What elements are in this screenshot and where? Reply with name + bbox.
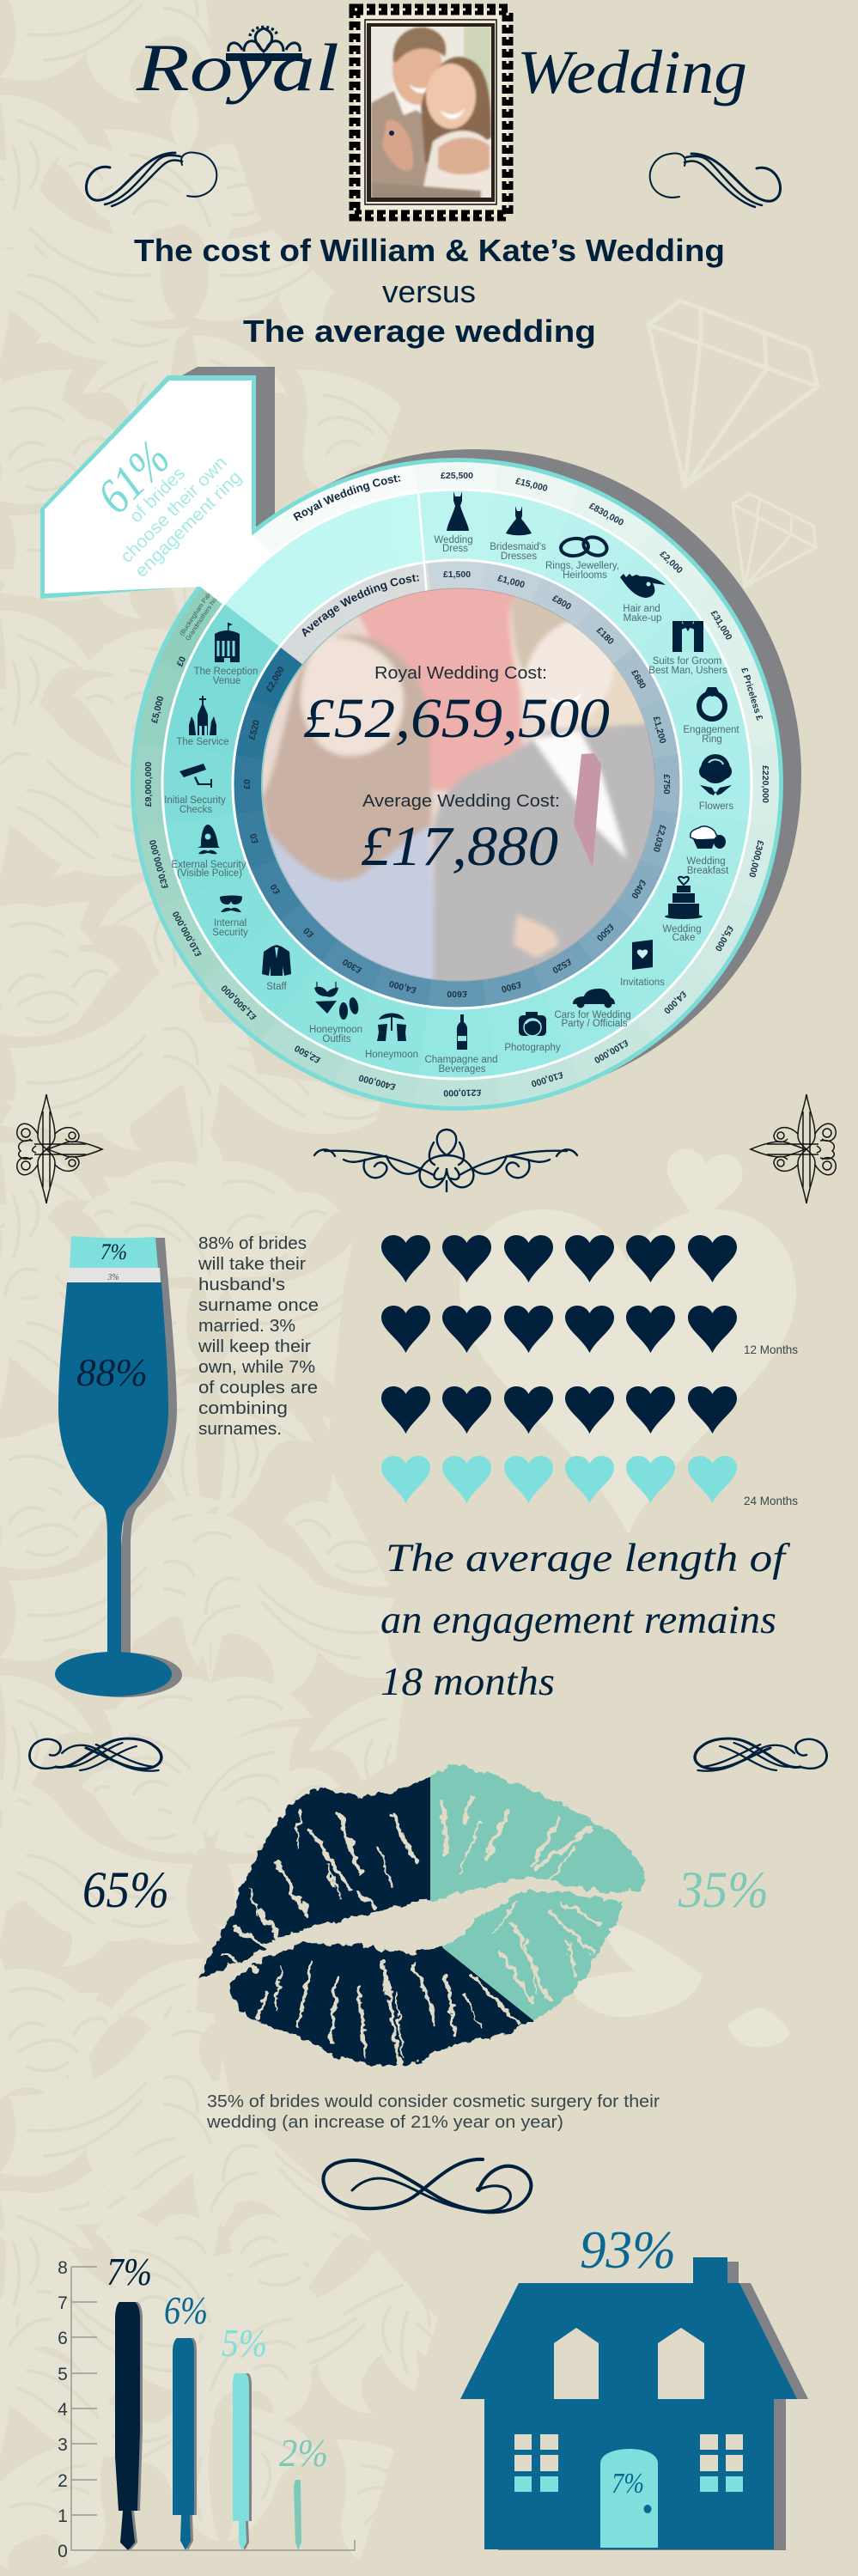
- callout: 61% of brides choose their own engagement ring: engagement ring: [131, 467, 246, 582]
- hearts chart: months of engagement: [381, 1235, 798, 1507]
- inner ring values: average wedding costs: £0: [242, 779, 253, 789]
- text block: cosmetic surgery statistic: wedding (an increase of 21% year on year): [206, 2113, 563, 2132]
- script text: average engagement length: [380, 1536, 791, 1704]
- item: initial security checks: Checks: [180, 805, 212, 815]
- item: staff: [262, 945, 291, 992]
- teal window panes: [514, 2476, 743, 2492]
- glass chart: surname statistics: 7%: [100, 1239, 127, 1264]
- item: wedding dress: [434, 491, 473, 554]
- item: honeymoon outfits: [309, 982, 362, 1044]
- title: Wedding: Wedding: [517, 38, 747, 107]
- item: invitations: Invitations: [620, 977, 665, 988]
- chart axes and scale: 3: [58, 2435, 68, 2455]
- item: rings, jewellery, heirlooms: Heirlooms: [563, 570, 607, 581]
- item: external security (visible police): [172, 825, 246, 879]
- photo frame with portrait of William and Kate: [355, 9, 508, 216]
- script text: average engagement length: The average length of: [386, 1536, 791, 1580]
- item: wedding cake: Wedding: [662, 924, 702, 935]
- item: wedding cake: Cake: [672, 933, 695, 943]
- glass band: 3%: [68, 1268, 161, 1282]
- 65 percent label: 65%: [82, 1861, 169, 1918]
- icon: tiara: [226, 27, 302, 61]
- item: bridesmaid's dresses: Bridesmaid's: [490, 542, 546, 552]
- text block: surname statistics: will take their: [198, 1255, 306, 1274]
- item: wedding breakfast: Breakfast: [687, 866, 729, 876]
- item: honeymoon outfits: Outfits: [322, 1034, 351, 1044]
- ornament: right knot flourish: [695, 1739, 827, 1771]
- item: external security (visible police): External Security: [172, 860, 246, 870]
- chart axes and scale: 7: [58, 2293, 68, 2313]
- outer ring values: royal wedding costs: £400,000: [357, 1072, 397, 1092]
- outer ring values: royal wedding costs: £220,000: [760, 765, 770, 803]
- item: wedding breakfast: Wedding: [686, 856, 726, 867]
- dormer windows: [554, 2328, 704, 2399]
- ring label: Royal Wedding Cost: Royal Wedding Cost:: [293, 474, 400, 521]
- background icon: large diamond outline: [648, 301, 818, 487]
- outer ring values: royal wedding costs: £210,000: [443, 1087, 481, 1098]
- item: wedding cake: [662, 877, 703, 943]
- faint background lips large: [569, 1921, 703, 2017]
- house windows: [514, 2434, 743, 2471]
- house body and roof: [460, 2257, 797, 2549]
- glass bowl and stem: 88%: [58, 1282, 168, 1656]
- wheel drop shadow: [149, 449, 801, 1102]
- inner ring values: average wedding costs: £180: [594, 625, 616, 647]
- glass chart: surname statistics: 88%: [76, 1350, 148, 1394]
- text block: surname statistics: surname once: [198, 1296, 319, 1315]
- bar chart: pen bars: [58, 2250, 355, 2561]
- item: cars for wedding party / officials: Cars for Wedding: [554, 1010, 631, 1020]
- item: champagne and beverages: Beverages: [439, 1064, 486, 1075]
- chart axes and scale: [58, 2258, 355, 2561]
- item: honeymoon: Honeymoon: [365, 1050, 418, 1060]
- inner ring values: average wedding costs: £0: [301, 925, 316, 940]
- house chart: 93% vs 7%: [460, 2221, 808, 2550]
- outer ring values: royal wedding costs: £4,000: [661, 989, 688, 1016]
- inner ring values: average wedding costs: £680: [629, 668, 648, 691]
- inner ring values: average wedding costs: £0: [268, 882, 283, 896]
- item: the reception venue: Venue: [213, 676, 240, 686]
- item: initial security checks: Initial Security: [164, 795, 226, 806]
- outer ring values: royal wedding costs: £100,000: [592, 1038, 630, 1065]
- chart axes and scale: 1: [58, 2506, 68, 2526]
- ornament: central scroll divider: [314, 1130, 577, 1191]
- item: rings, jewellery, heirlooms: [545, 533, 619, 581]
- inner ring: average wedding cost bands: [161, 489, 752, 1080]
- glass rim: 7%: [70, 1236, 158, 1268]
- item: bridesmaid's dresses: Dresses: [501, 551, 537, 562]
- outer ring values: royal wedding costs: £830,000: [587, 501, 625, 528]
- outer ring values: royal wedding costs: £25,500: [441, 471, 473, 481]
- item: honeymoon outfits: Honeymoon: [309, 1025, 362, 1035]
- outer ring values: royal wedding costs: Grandmothers house): [184, 586, 226, 642]
- outer ring values: royal wedding costs: £5,000: [149, 695, 166, 724]
- outer ring values: royal wedding costs: £5,000: [713, 924, 735, 953]
- item: wedding breakfast: [686, 826, 729, 876]
- background icon: small diamond outline: [733, 494, 816, 587]
- script text: average engagement length: an engagement remains: [380, 1598, 776, 1642]
- pen value labels: [106, 2250, 328, 2475]
- inner ring values: average wedding costs: £520: [551, 956, 573, 975]
- house door: 7%: 7%: [612, 2468, 644, 2500]
- callout: 61% of brides choose their own engagement ring: choose their own: [117, 453, 231, 567]
- item: honeymoon: [365, 1014, 418, 1060]
- glass chart: surname statistics: 3%: [106, 1273, 119, 1282]
- callout shadow: [182, 367, 275, 537]
- inner ring values: average wedding costs: £2,030: [651, 824, 668, 853]
- wheel outer teal rim: [131, 458, 783, 1111]
- inner ring values: average wedding costs: £750: [661, 774, 672, 795]
- item: suits for groom, best man, ushers: Suits for Groom: [653, 656, 721, 667]
- item: invitations: [620, 940, 665, 988]
- middle ring: item bands: [94, 421, 820, 1148]
- callout: 61% of brides choose their own engagement ring: of brides: [126, 464, 189, 527]
- text block: surname statistics: 88% of brides: [198, 1234, 307, 1253]
- inner ring values: average wedding costs: £1,200: [651, 716, 668, 745]
- center number: royal total: £52,659,500: [303, 687, 610, 750]
- item: hair and make-up: [620, 574, 666, 624]
- chart axes and scale: 6: [58, 2329, 68, 2348]
- text block: surname statistics: own, while 7%: [198, 1358, 315, 1377]
- glass chart: surname statistics: [55, 1236, 182, 1697]
- 35 percent label: 35%: [678, 1861, 769, 1918]
- inner ring values: average wedding costs: £2,000: [264, 665, 287, 694]
- pen value labels: 6%: [164, 2288, 208, 2332]
- pen bar 2%: [294, 2480, 301, 2550]
- script text: average engagement length: 18 months: [380, 1659, 555, 1704]
- heading: The average wedding: The average wedding: [243, 314, 596, 349]
- item: champagne and beverages: Champagne and: [424, 1055, 498, 1065]
- inner ring values: average wedding costs: £1,000: [496, 573, 526, 590]
- chart axes and scale: 0: [58, 2542, 68, 2561]
- outer ring values: royal wedding costs: (Buckingham Palace-: [178, 582, 219, 637]
- glass shadow: [121, 1238, 177, 1662]
- center text: Average Wedding Cost: Average Wedding Cost:: [362, 792, 560, 811]
- outer ring values: royal wedding costs: £0: [174, 655, 188, 668]
- outer ring values: royal wedding costs: £30,000,000: [148, 838, 171, 890]
- outer ring values: royal wedding costs: £2,500: [293, 1043, 322, 1065]
- heading: The cost of William & Kate's Wedding: The cost of William & Kate’s Wedding: [134, 233, 725, 268]
- item: hair and make-up: Make-up: [624, 613, 661, 624]
- title: Royal: Royal: [136, 30, 339, 105]
- item: engagement ring: Engagement: [683, 725, 739, 735]
- item: engagement ring: Ring: [702, 734, 722, 745]
- chart axes and scale: 5: [58, 2365, 68, 2384]
- center number: average total: £17,880: [361, 815, 558, 878]
- item: the reception venue: The Reception: [194, 667, 258, 677]
- item: the service: [176, 696, 229, 747]
- pen bar 5%: [233, 2373, 252, 2550]
- glass base shadow: [64, 1653, 182, 1697]
- callout: 61% of brides choose their own engagement ring: 61%: [86, 429, 180, 524]
- item: suits for groom, best man, ushers: Best Man, Ushers: [648, 666, 727, 676]
- house value: 93%: 93%: [580, 2221, 676, 2280]
- heading: versus: versus: [382, 274, 476, 309]
- item: suits for groom, best man, ushers: [648, 621, 727, 676]
- text block: surname statistics: of couples are: [198, 1379, 318, 1398]
- item: initial security checks: [164, 764, 226, 815]
- faint background lips small: [727, 2007, 790, 2047]
- item: bridesmaid's dresses: [490, 506, 546, 562]
- item: rings, jewellery, heirlooms: Rings, Jewellery,: [545, 561, 619, 571]
- outer ring values: royal wedding costs: [143, 471, 770, 1098]
- item: internal security: Security: [212, 928, 248, 938]
- ornament: infinity flourish: [324, 2159, 531, 2212]
- text block: surname statistics: will keep their: [198, 1337, 311, 1356]
- outer ring values: royal wedding costs: £1,500,000: [219, 983, 259, 1022]
- ornament: top left flourish: [86, 153, 216, 206]
- item: photography: Photography: [504, 1043, 561, 1053]
- outer ring values: royal wedding costs: £10,000: [530, 1069, 564, 1089]
- center text: Royal Wedding Cost: Royal Wedding Cost:: [374, 664, 547, 683]
- chart axes and scale: 2: [58, 2471, 68, 2491]
- outer ring values: royal wedding costs: £ Priceless £: [739, 667, 764, 722]
- house shadow: [498, 2262, 808, 2550]
- ornament: left knot flourish: [29, 1739, 161, 1771]
- outer ring values: royal wedding costs: £31,000: [709, 609, 734, 642]
- item: photography: [504, 1012, 561, 1053]
- text block: surname statistics: [198, 1234, 319, 1439]
- item: external security (visible police): (Visible Police): [177, 868, 242, 879]
- panel: cost wheel: [131, 458, 783, 1111]
- inner ring values: average wedding costs: £600: [447, 989, 467, 999]
- pen value labels: 2%: [279, 2431, 328, 2475]
- item: wedding dress: Wedding: [434, 535, 473, 545]
- inner ring values: average wedding costs: £0: [248, 832, 261, 844]
- ornament: top right flourish: [650, 154, 781, 207]
- text block: surname statistics: combining: [198, 1399, 288, 1418]
- glass base: [55, 1652, 172, 1696]
- item: flowers: [699, 754, 733, 812]
- text block: cosmetic surgery statistic: [206, 2092, 660, 2132]
- hearts chart: months of engagement: 24 Months: [744, 1494, 798, 1507]
- inner ring values: average wedding costs: £1,500: [443, 569, 471, 580]
- hearts chart: months of engagement: 12 Months: [744, 1343, 798, 1356]
- item: engagement ring: [683, 687, 739, 745]
- inner ring values: average wedding costs: £300: [341, 956, 363, 975]
- callout: 61% of brides choose their own engagement ring: [40, 375, 272, 605]
- pen bar 6%: [173, 2338, 197, 2550]
- chart axes and scale: 8: [58, 2258, 68, 2278]
- text block: surname statistics: married. 3%: [198, 1317, 295, 1336]
- item: cars for wedding party / officials: Party / Officials: [561, 1019, 628, 1029]
- background icon: small faint heart: [660, 1147, 745, 1232]
- inner ring values: average wedding costs: £500: [594, 922, 616, 943]
- inner ring values: average wedding costs: £400: [629, 878, 648, 900]
- inner ring values: average wedding costs: £800: [551, 594, 573, 612]
- text block: surname statistics: surnames.: [198, 1420, 282, 1439]
- item: wedding dress: Dress: [442, 544, 468, 554]
- pen value labels: 5%: [222, 2321, 267, 2365]
- item: staff: Staff: [266, 982, 288, 992]
- item: internal security: Internal: [214, 918, 246, 929]
- inner ring values: average wedding costs: £520: [246, 719, 262, 741]
- ornament: left fleur corner: [17, 1094, 102, 1203]
- ring label: Average Wedding Cost: Average Wedding Cost:: [302, 574, 419, 637]
- center photo of the couple: [258, 584, 678, 988]
- lips chart: 65% navy and 35% teal: [199, 1766, 646, 2067]
- item: the service: The Service: [176, 737, 229, 747]
- item: hair and make-up: Hair and: [623, 604, 660, 614]
- item: the reception venue: [194, 623, 258, 686]
- pen bar 7%: [115, 2302, 143, 2550]
- chart axes and scale: 4: [58, 2400, 68, 2420]
- text block: surname statistics: husband's: [198, 1276, 285, 1294]
- inner ring values: average wedding costs: [242, 569, 672, 999]
- house door: 7%: [600, 2449, 658, 2548]
- outer ring values: royal wedding costs: £9,000,000: [143, 762, 154, 807]
- outer ring values: royal wedding costs: £10,000,000: [171, 909, 204, 958]
- ornament: right fleur corner: [751, 1094, 836, 1203]
- item: internal security: [212, 895, 248, 938]
- outer ring: royal wedding cost bands: [25, 352, 858, 1216]
- item: cars for wedding party / officials: [554, 989, 631, 1029]
- text block: cosmetic surgery statistic: 35% of brides would consider cosmetic surgery for their: [207, 2092, 660, 2111]
- inner ring values: average wedding costs: £900: [500, 979, 522, 995]
- item: flowers: Flowers: [699, 801, 733, 812]
- outer ring values: royal wedding costs: £15,000: [514, 476, 549, 494]
- outer ring values: royal wedding costs: £300,000: [746, 839, 765, 879]
- item: champagne and beverages: [424, 1014, 498, 1075]
- pen value labels: 7%: [106, 2250, 152, 2293]
- outer ring values: royal wedding costs: £2,000: [658, 549, 685, 575]
- inner ring values: average wedding costs: £4,000: [388, 978, 417, 996]
- background icon: large faint heart: [459, 1209, 796, 1534]
